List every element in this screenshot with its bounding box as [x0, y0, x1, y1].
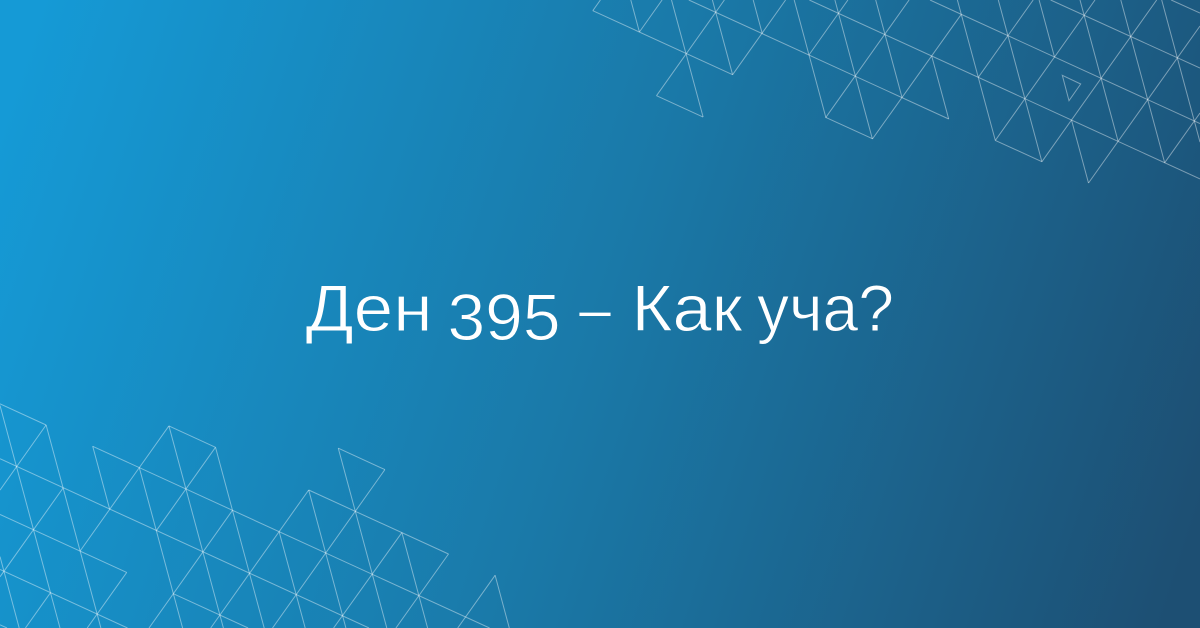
title: Ден: [306, 271, 432, 345]
title: уча?: [757, 271, 894, 345]
title: Как: [632, 271, 744, 345]
title: [306, 271, 894, 354]
title: –: [579, 271, 611, 345]
title: 395: [448, 280, 560, 354]
triangle pattern: bottom left: [0, 404, 509, 628]
triangle pattern: top right: [593, 0, 1200, 183]
